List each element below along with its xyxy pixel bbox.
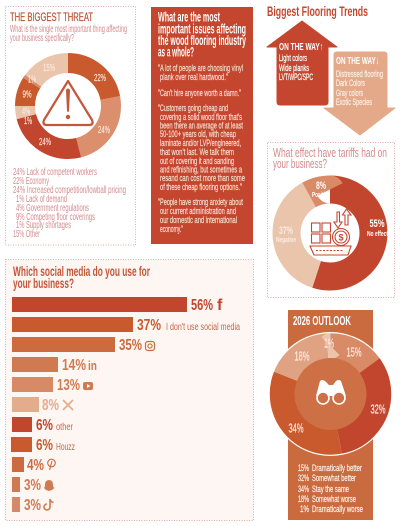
list: trending down: Gray colors: [336, 88, 363, 99]
bar: other 6%: [12, 417, 73, 434]
quote 3: [158, 103, 245, 193]
bar: linkedin 14%: in: [88, 358, 97, 373]
pie labels: outlook: 1%: [324, 336, 334, 350]
donut chart: biggest threat: [25, 63, 111, 149]
legend: outlook: 15%: [298, 463, 309, 474]
legend: outlook: 18%: [298, 494, 309, 505]
bar: houzz 6%: [11, 437, 75, 454]
bar: tiktok 3%: [12, 497, 54, 514]
panel: the biggest threat: [6, 6, 136, 245]
donut labels: 24%: [98, 125, 110, 136]
quote 3: resand can cost more than some: [160, 173, 245, 184]
question text: [10, 24, 127, 44]
donut labels: 1%: [24, 116, 32, 127]
pie labels: outlook: 32%: [370, 402, 386, 416]
quote 4: our domestic and international: [160, 215, 237, 226]
legend list: 4% Government regulations: [16, 203, 89, 214]
panel: important issues quotes: [151, 7, 253, 244]
heading: tariffs question: your business?: [273, 157, 327, 171]
bar: no social media 37%: [12, 317, 240, 334]
quote 3: covering a solid wood floor that's: [160, 112, 242, 123]
legend: outlook: Dramatically worse: [312, 504, 363, 515]
quote 3: been there an average of at least: [160, 120, 243, 132]
bar: facebook 56%: f: [217, 297, 223, 314]
list: trending down: [336, 69, 383, 108]
list: trending up: [279, 53, 313, 83]
icon: binoculars: [316, 380, 346, 404]
quote 1: "A lot of people are choosing vinyl: [158, 63, 243, 74]
donut labels: 15%: [43, 63, 55, 74]
legend: outlook: 34%: [298, 484, 309, 495]
legend list: 24% Increased competition/lowball pricing: [13, 185, 126, 196]
arrow: on the way down: [324, 52, 395, 135]
heading: important issues: important issues affecting: [158, 22, 246, 36]
bar: no social media 37%: I don't use social media: [166, 322, 240, 333]
quote 3: out of covering it and sanding: [160, 156, 234, 167]
donut labels: 24%: [39, 137, 51, 148]
heading: social media question: [13, 264, 150, 291]
icon: cargo ship with tariffs: [310, 209, 351, 255]
bar: facebook 56%: [12, 297, 223, 314]
quote 3: 50-100+ years old, with cheap: [160, 129, 236, 140]
quote 1: [158, 63, 243, 83]
bar: snapchat 3%: 3%: [24, 477, 41, 494]
donut labels: tariffs: No effect: [367, 229, 388, 238]
legend: outlook: Dramatically better: [312, 463, 362, 474]
quote 4: [158, 197, 243, 235]
donut labels: tariffs: 37%: [279, 225, 293, 237]
heading: 2026 outlook: 2026 OUTLOOK: [293, 314, 351, 328]
bar: youtube 13%: 13%: [57, 377, 80, 394]
quote 4: our current administration and: [160, 206, 236, 217]
quote 1: plank over real hardwood.": [160, 72, 228, 83]
bar: other 6%: 6%: [36, 417, 53, 434]
heading: the biggest threat: THE BIGGEST THREAT: [10, 10, 93, 24]
list: trending down: Exotic Species: [336, 97, 372, 108]
legend: outlook: Somewhat worse: [312, 494, 356, 505]
donut labels: 9%: [22, 90, 32, 100]
panel: tariffs: [268, 142, 394, 298]
donut labels: tariffs: Positive: [312, 190, 330, 199]
legend list: 1% Supply shortages: [16, 220, 71, 231]
donut chart: tariffs: [286, 190, 374, 276]
bar: no social media 37%: 37%: [137, 317, 161, 334]
bar: houzz 6%: 6%: [36, 437, 53, 454]
bar: facebook 56%: 56%: [191, 297, 213, 314]
quote 4: economy.": [160, 224, 183, 235]
legend list: 9% Competing floor coverings: [16, 212, 95, 223]
bar: x 8%: 8%: [42, 397, 59, 414]
quote 3: and refinishing, but sometimes a: [160, 164, 242, 176]
quote 3: that won't last. We talk them: [160, 147, 234, 158]
question text: What is the single most important thing affecting: [10, 24, 127, 35]
legend: outlook: Stay the same: [312, 484, 349, 495]
bar: instagram 35%: [12, 337, 154, 354]
bar: pinterest 4%: [12, 457, 55, 474]
heading: important issues: What are the most: [158, 10, 220, 24]
legend: outlook: Somewhat better: [312, 473, 356, 484]
donut labels: 4%: [22, 106, 30, 118]
heading: important issues: as a whole?: [158, 44, 194, 60]
list: trending up: Wide planks: [279, 63, 309, 74]
list: trending down: Dark Colors: [336, 78, 365, 89]
donut labels: [22, 63, 110, 148]
legend: outlook: 1%: [300, 504, 309, 515]
legend list: 1% Lack of demand: [16, 194, 67, 205]
bar: tiktok 3%: 3%: [24, 497, 41, 514]
heading: tariffs question: [273, 146, 387, 171]
donut labels: tariffs: [276, 180, 388, 244]
legend list: 22% Economy: [13, 176, 49, 187]
quote 3: of these cheap flooring options.": [160, 182, 242, 193]
heading: important issues: the wood flooring industry: [158, 33, 246, 48]
panel: 2026 outlook: [268, 310, 392, 520]
quote 4: "People have strong anxiety about: [158, 197, 243, 208]
donut labels: tariffs: Negative: [276, 235, 296, 244]
bar: pinterest 4%: 4%: [27, 457, 44, 474]
bar: x 8%: [12, 397, 73, 414]
legend: outlook: [298, 463, 363, 515]
quote 3: laminate and/or LVP/engineered,: [160, 138, 241, 149]
pie labels: outlook: [288, 336, 386, 436]
bar: youtube 13%: [12, 377, 93, 394]
panel: social media: [6, 260, 254, 520]
donut labels: tariffs: 8%: [316, 180, 326, 192]
heading: social media question: Which social media do you use for: [13, 264, 150, 279]
donut labels: tariffs: 55%: [370, 218, 385, 230]
donut labels: 1%: [28, 74, 36, 86]
pie labels: outlook: 18%: [294, 350, 310, 364]
bar: other 6%: other: [56, 422, 73, 433]
donut labels: 22%: [94, 73, 106, 84]
pie labels: outlook: 34%: [288, 422, 304, 436]
quote 2: "Can't hire anyone worth a damn.": [158, 88, 241, 99]
pie labels: outlook: 15%: [346, 346, 362, 360]
bar: snapchat 3%: [12, 477, 54, 494]
list: trending up: Light colors: [279, 53, 307, 64]
heading: important issues: [158, 10, 246, 60]
heading: social media question: your business?: [13, 276, 74, 291]
legend list: 24% Lack of competent workers: [13, 167, 97, 178]
legend: outlook: 32%: [298, 473, 309, 484]
bar: linkedin 14%: [12, 357, 97, 374]
bar: houzz 6%: Houzz: [56, 442, 75, 453]
legend list: 15% Other: [13, 229, 40, 240]
label: on the way up: ON THE WAY↑: [279, 41, 323, 53]
question text: your business specifically?: [10, 33, 74, 44]
icon: cargo ship with tariffs: $: [338, 232, 344, 242]
quote 3: "Customers going cheap and: [158, 103, 228, 114]
list: trending up: LVT/WPC/SPC: [279, 72, 313, 83]
arrow: on the way up: [267, 21, 337, 105]
bar: instagram 35%: 35%: [119, 337, 142, 354]
bar: linkedin 14%: 14%: [62, 357, 86, 374]
pie chart: outlook: [268, 332, 392, 456]
icon: warning triangle: [43, 81, 93, 125]
legend list: [13, 167, 126, 240]
